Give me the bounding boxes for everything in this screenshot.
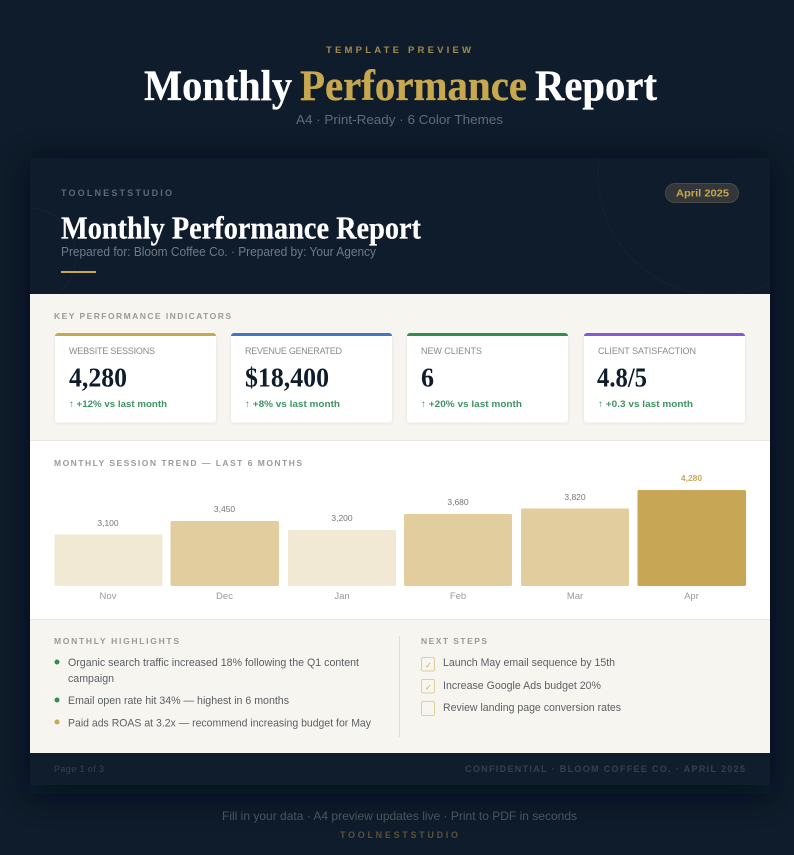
date badge: [666, 184, 738, 202]
monthly highlights: Organic search traffic increased 18% following the Q1 content: [68, 657, 359, 669]
kpi card: revenue generated: $18,400: [245, 362, 329, 392]
report card: [30, 158, 770, 785]
kpi card: client satisfaction: CLIENT SATISFACTION: [598, 346, 696, 356]
bar chart: 3,100: [97, 518, 119, 528]
kpi card: revenue generated: ↑ +8% vs last month: [245, 399, 340, 410]
main title: Monthly: [144, 63, 292, 110]
kpi card: revenue generated: REVENUE GENERATED: [245, 346, 342, 356]
subtitle: A4 · Print-Ready · 6 Color Themes: [296, 112, 504, 127]
brand label: TOOLNESTSTUDIO: [61, 188, 172, 198]
kpi card: new clients: [406, 333, 569, 424]
next steps: Increase Google Ads budget 20%: [443, 680, 601, 692]
kpi card: client satisfaction: ↑ +0.3 vs last month: [598, 399, 693, 410]
main title: [144, 63, 658, 110]
panel: highlights and next steps: [30, 620, 770, 753]
kpi card: revenue generated: [230, 333, 393, 424]
panel: key performance indicators: [30, 294, 770, 441]
section heading: KEY PERFORMANCE INDICATORS: [54, 311, 231, 321]
page header: [144, 45, 658, 127]
main title: Performance: [300, 63, 527, 110]
monthly highlights: MONTHLY HIGHLIGHTS: [54, 636, 179, 646]
bar chart: Feb: [450, 591, 466, 602]
bar chart: Mar: [567, 591, 583, 602]
panel: report footer: Page 1 of 3: [54, 764, 104, 774]
bar chart: [54, 473, 746, 602]
page footer: Fill in your data · A4 preview updates live · Print to PDF in seconds: [222, 809, 577, 823]
report title: Monthly Performance Report: [61, 210, 421, 246]
monthly highlights: [54, 636, 371, 730]
kpi card: new clients: 6: [421, 362, 434, 392]
bar chart: 3,200: [331, 513, 353, 523]
kpi card: new clients: ↑ +20% vs last month: [421, 399, 522, 410]
kpi card: client satisfaction: [583, 333, 746, 424]
page footer: TOOLNESTSTUDIO: [340, 830, 458, 840]
bar chart: Jan: [334, 591, 350, 602]
eyebrow label: TEMPLATE PREVIEW: [326, 45, 471, 56]
bar chart: 3,820: [564, 492, 586, 502]
panel: report footer: [30, 753, 770, 785]
monthly highlights: Paid ads ROAS at 3.2x — recommend increasing budget for May: [68, 718, 371, 730]
panel: report header: [30, 158, 770, 294]
next steps: [421, 636, 621, 716]
accent rule: [61, 271, 96, 273]
next steps: ✓: [425, 683, 432, 692]
panel: report footer: CONFIDENTIAL · BLOOM COFFEE CO. · APRIL 2025: [465, 764, 745, 774]
kpi card: new clients: NEW CLIENTS: [421, 346, 482, 356]
bar chart: Dec: [216, 591, 233, 602]
next steps: NEXT STEPS: [421, 636, 487, 646]
prepared for: Prepared for: Bloom Coffee Co. · Prepared by: Your Agency: [61, 245, 377, 259]
bar chart: 4,280: [681, 473, 702, 483]
next steps: Review landing page conversion rates: [443, 702, 621, 714]
kpi card: website sessions: ↑ +12% vs last month: [69, 399, 167, 410]
next steps: ✓: [425, 661, 432, 670]
monthly highlights: campaign: [68, 673, 114, 685]
bar chart: 3,680: [447, 497, 469, 507]
monthly highlights: Email open rate hit 34% — highest in 6 months: [68, 695, 289, 707]
bar chart: Apr: [684, 591, 699, 602]
kpi card: website sessions: [54, 333, 217, 424]
kpi card: client satisfaction: 4.8/5: [597, 362, 647, 392]
panel: monthly session trend: [30, 440, 770, 620]
main title: Report: [535, 63, 658, 110]
page footer: [222, 809, 577, 840]
section heading: MONTHLY SESSION TREND — LAST 6 MONTHS: [54, 458, 302, 468]
date badge: April 2025: [676, 188, 729, 200]
kpi card: website sessions: WEBSITE SESSIONS: [69, 346, 155, 356]
kpi card: website sessions: 4,280: [69, 362, 127, 392]
bar chart: 3,450: [214, 504, 235, 514]
bar chart: Nov: [100, 591, 117, 602]
next steps: Launch May email sequence by 15th: [443, 657, 615, 669]
